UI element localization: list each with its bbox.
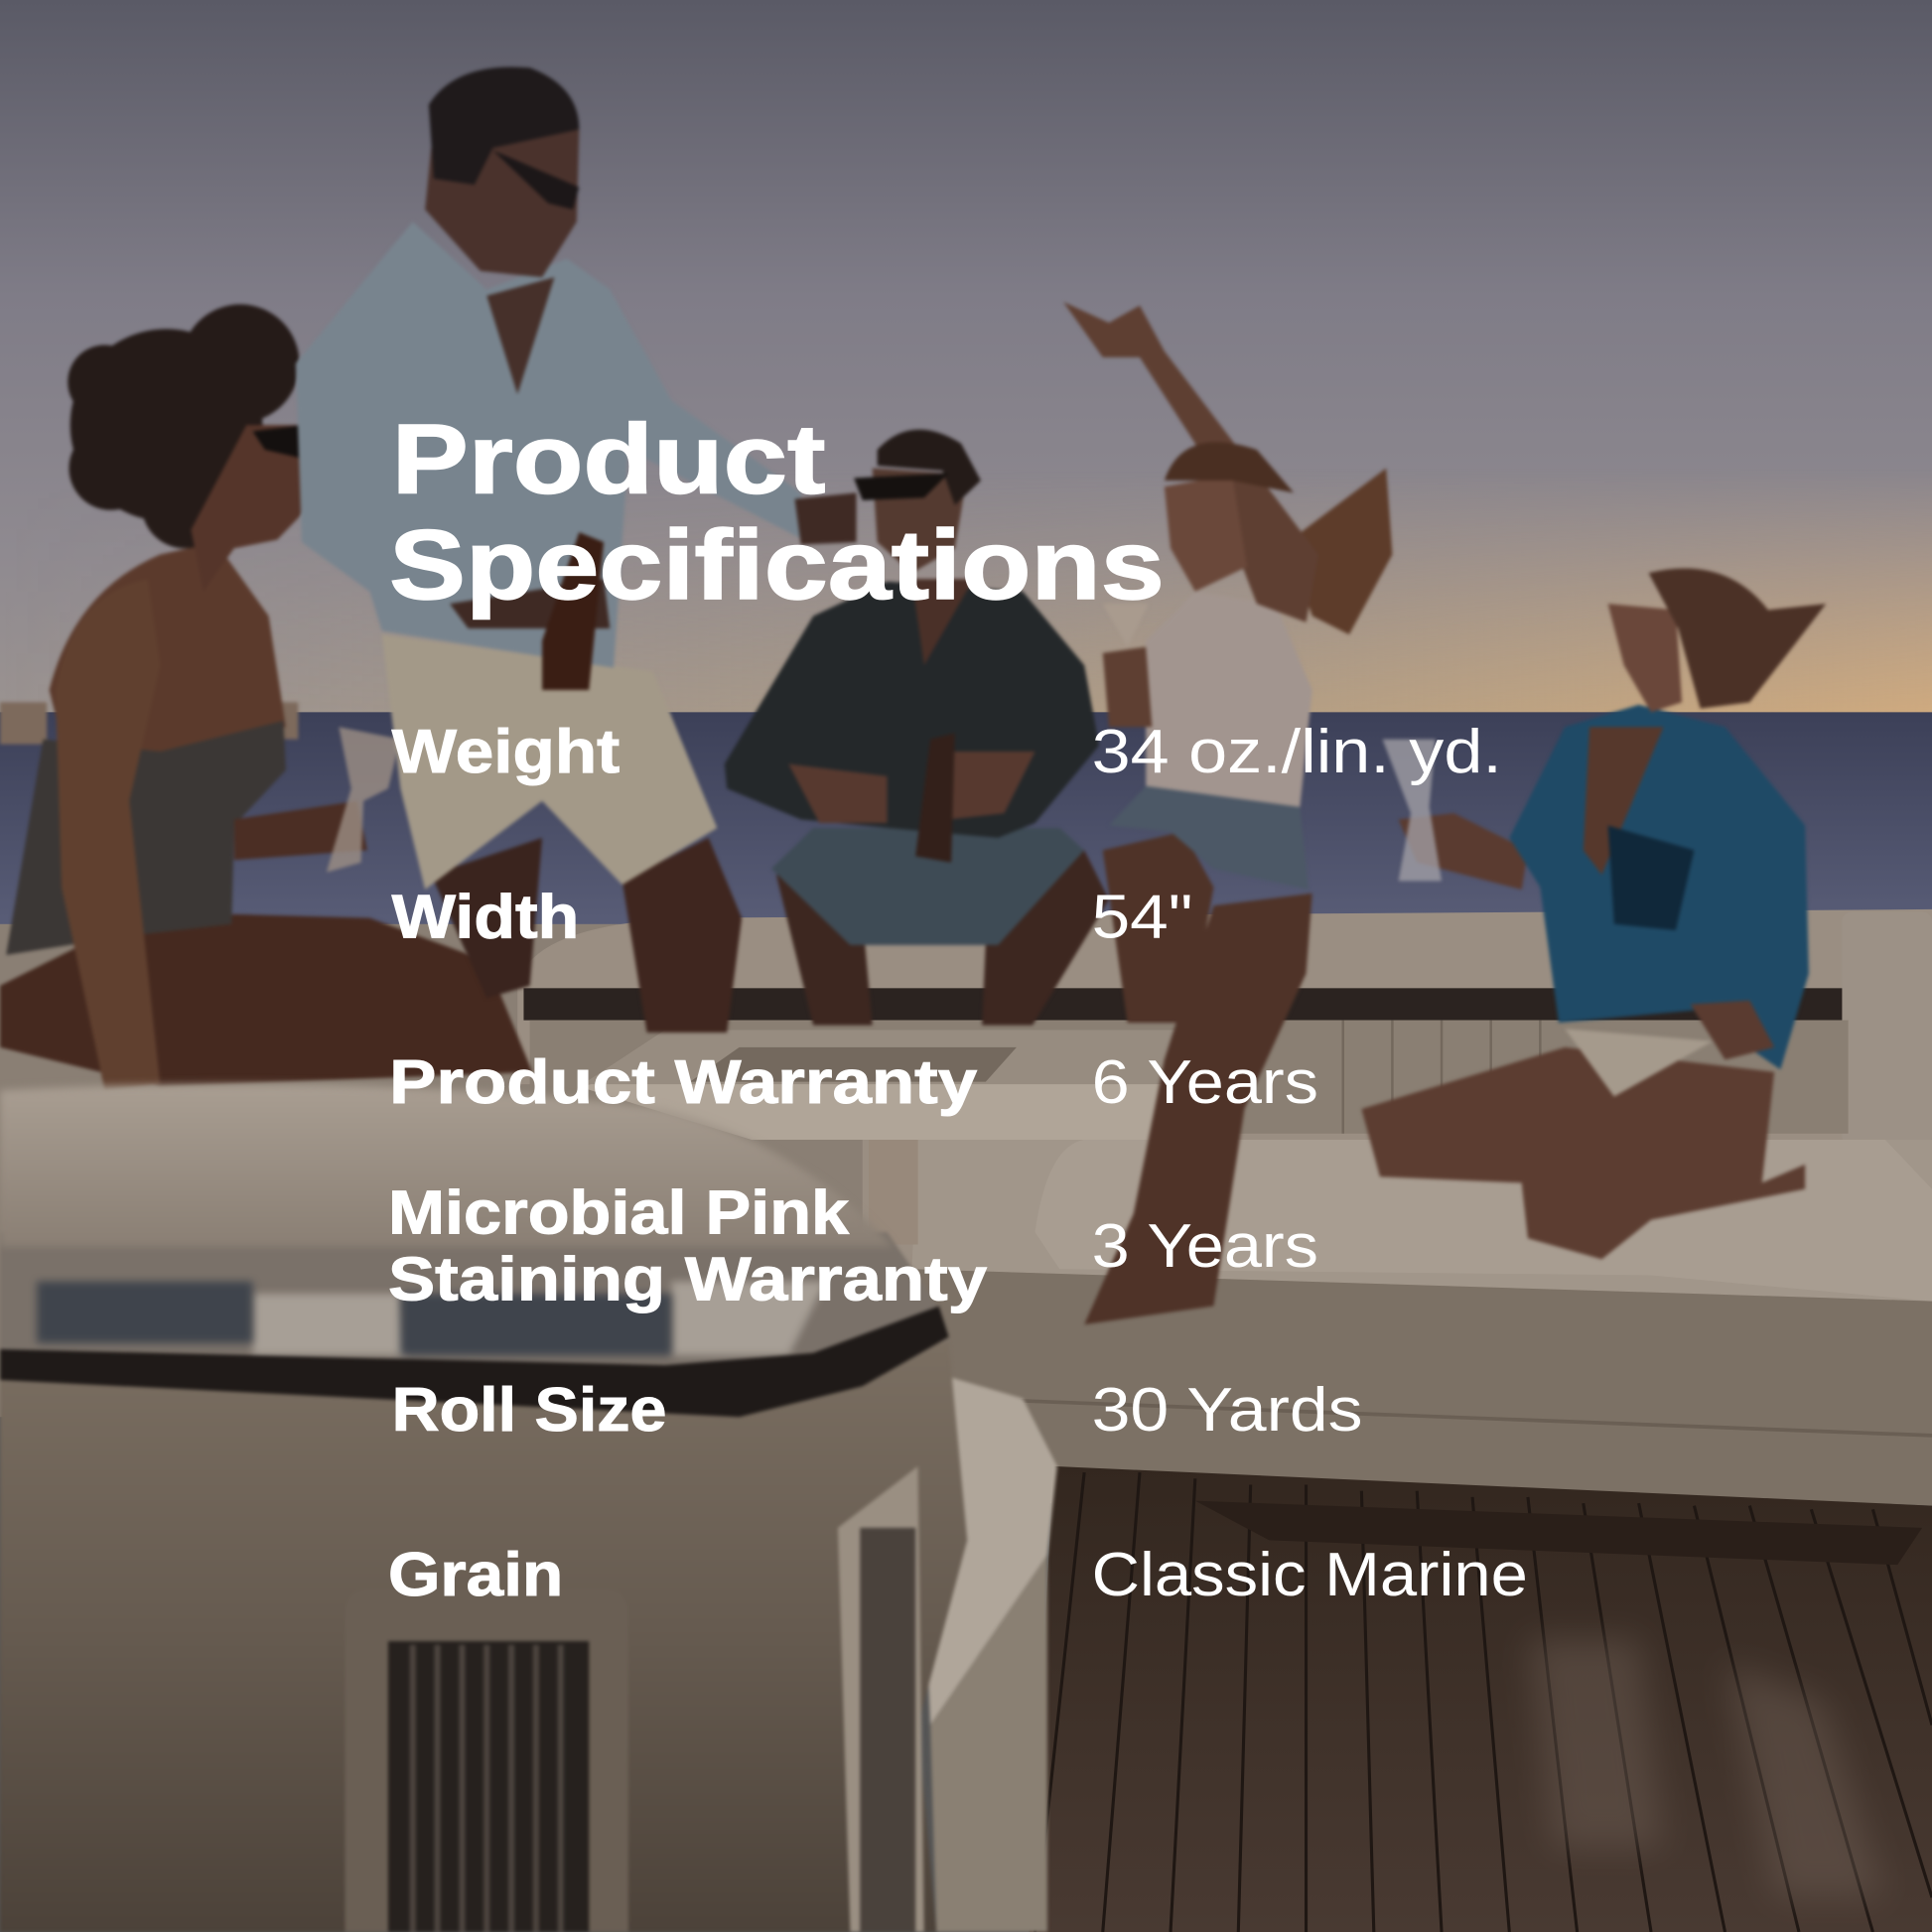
distant shoreline <box>0 702 298 745</box>
spec row: grain <box>388 1541 1528 1609</box>
person: kneeling woman <box>1361 568 1826 1259</box>
person: standing man <box>296 67 857 1033</box>
sky <box>0 0 1932 740</box>
spec row: microbial pink staining warranty: 3 Years <box>1092 1212 1318 1281</box>
spec row: width: 54" <box>1092 883 1192 951</box>
spec row: product warranty: Product Warranty <box>389 1048 978 1117</box>
title <box>389 404 1165 621</box>
spec row: grain: Classic Marine <box>1092 1541 1528 1609</box>
spec row: microbial pink staining warranty: Staining Warranty <box>388 1245 988 1313</box>
boat seating <box>0 909 1932 1506</box>
title: Product <box>392 404 826 514</box>
spec row: roll size <box>392 1376 1363 1445</box>
spec row: weight <box>392 718 1502 786</box>
spec row: width: Width <box>392 883 579 951</box>
person: seated woman at left <box>0 305 532 1090</box>
spec row: product warranty: 6 Years <box>1092 1048 1318 1117</box>
teak deck <box>1029 1466 1932 1932</box>
spec row: grain: Grain <box>388 1541 563 1609</box>
sea <box>0 712 1932 934</box>
title: Specifications <box>389 510 1165 621</box>
spec row: microbial pink staining warranty <box>388 1178 1318 1313</box>
person: seated man in dark shirt <box>725 430 1109 1026</box>
spec row: product warranty <box>389 1048 1318 1117</box>
spec row: weight: Weight <box>392 718 620 786</box>
table <box>579 1031 1247 1244</box>
blurred foreground console <box>0 1084 1057 1932</box>
spec row: weight: 34 oz./lin. yd. <box>1092 718 1502 786</box>
spec row: width <box>392 883 1192 951</box>
spec row: roll size: 30 Yards <box>1092 1376 1363 1445</box>
spec row: microbial pink staining warranty: Microbial Pink <box>388 1178 850 1247</box>
spec row: roll size: Roll Size <box>392 1376 666 1445</box>
person: dancing woman <box>1063 302 1392 1324</box>
